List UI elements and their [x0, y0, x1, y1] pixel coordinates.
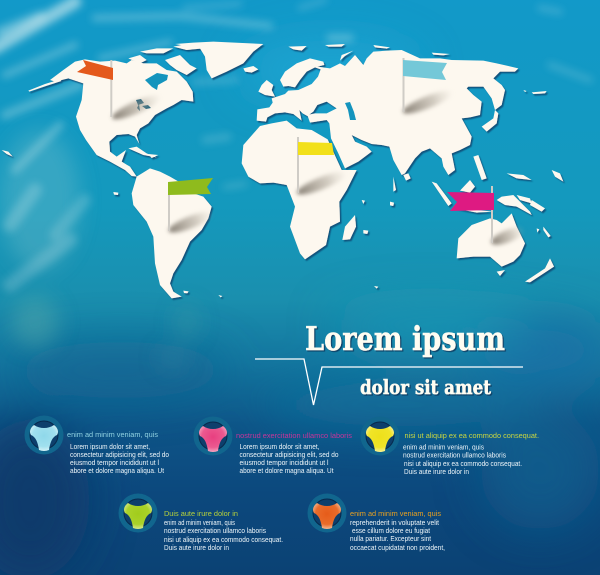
flag: Australia, magenta	[447, 186, 527, 248]
block 5 text: reprehenderit in voluptate velit	[350, 518, 439, 527]
Caspian Sea	[345, 102, 356, 120]
flag: Africa, yellow	[295, 137, 349, 199]
block 1 text: abore et dolore magna aliqua. Ut	[70, 466, 164, 475]
icon: light blue badge	[24, 416, 64, 454]
block 3 text: nisi ut aliquip ex ea commodo consequat.	[404, 459, 522, 468]
New Guinea	[497, 195, 532, 215]
block 2 text: abore et dolore magna aliqua. Ut	[240, 466, 334, 475]
South America	[132, 168, 212, 298]
block 5 text: esse cillum dolore eu fugiat	[352, 526, 430, 535]
Borneo	[460, 180, 475, 193]
block 2 text: consectetur adipisicing elit, sed do	[240, 450, 338, 459]
Great Lakes	[136, 99, 151, 111]
flag: Asia, cyan	[401, 58, 455, 118]
block 5 text: enim ad minim veniam, quis	[350, 509, 441, 518]
Hudson Bay	[145, 73, 168, 90]
icon: orange badge	[308, 494, 346, 532]
block 4 text: enim ad minim veniam, quis	[164, 518, 235, 527]
Arctic islands	[128, 55, 147, 63]
icon: yellow badge	[360, 416, 400, 456]
Eurasia	[257, 50, 518, 175]
Madagascar	[342, 215, 356, 240]
block 3 text: enim ad minim veniam, quis	[403, 442, 484, 452]
small American islets	[2, 150, 222, 297]
New Zealand	[525, 258, 554, 282]
North America	[50, 59, 193, 177]
block 3 text	[403, 431, 539, 476]
block 5 text: occaecat cupidatat non proident,	[350, 543, 445, 552]
block 2 text: nostrud exercitation ullamco laboris	[236, 431, 352, 440]
block 1 text	[67, 430, 169, 475]
block 1 text: eiusmod tempor incididunt ut l	[70, 458, 159, 467]
block 1 text: consectetur adipisicing elit, sed do	[70, 450, 169, 459]
inland waters	[136, 73, 356, 120]
flag: South America, green	[166, 178, 216, 237]
block 2 text: Lorem ipsum dolor sit amet,	[240, 442, 320, 451]
Aleutian chain	[28, 79, 61, 92]
block 4 text	[164, 509, 283, 552]
Americas and Greenland	[2, 42, 263, 298]
Cuba and Hispaniola	[128, 147, 157, 157]
Sri Lanka	[403, 173, 411, 181]
Indian Ocean and Pacific dots	[362, 170, 563, 289]
icon: pink badge	[194, 416, 232, 456]
block 4 text: nisi ut aliquip ex ea commodo consequat.	[164, 535, 283, 544]
block 2 text: eiusmod tempor incididunt ut l	[240, 458, 329, 467]
Arctic islands of Eurasia	[288, 44, 450, 61]
Africa	[242, 121, 357, 259]
block 1 text: Lorem ipsum dolor sit amet,	[70, 442, 150, 451]
block 5 text	[350, 509, 445, 552]
block 5 text: nulla pariatur. Excepteur sint	[350, 534, 431, 543]
Sumatra	[432, 182, 452, 206]
Australia	[457, 213, 525, 267]
callout line	[255, 359, 523, 405]
Philippines	[473, 155, 487, 180]
Kurils and Pacific islets	[523, 90, 551, 237]
block 4 text: nostrud exercitation ullamco laboris	[164, 526, 266, 535]
block 1 text: enim ad minim veniam, quis	[67, 430, 158, 439]
world map	[2, 42, 563, 298]
title: Lorem ipsum: Lorem ipsum	[305, 319, 505, 358]
Japan	[482, 110, 498, 132]
icon: green badge	[118, 494, 158, 532]
block 4 text: Duis aute irure dolor in	[164, 509, 238, 518]
block 3 text: nisi ut aliquip ex ea commodo consequat.	[404, 431, 539, 440]
Tasmania	[497, 270, 505, 276]
Java	[455, 208, 493, 213]
flag: Alaska, orange	[77, 60, 164, 123]
Iceland	[243, 66, 258, 73]
block 4 text: Duis aute irure dolor in	[164, 543, 229, 552]
subtitle: dolor sit amet: dolor sit amet	[360, 375, 492, 399]
block 3 text: nostrud exercitation ullamco laboris	[403, 450, 506, 460]
Old World	[242, 44, 563, 289]
United Kingdom and Ireland	[258, 80, 275, 97]
block 2 text	[236, 431, 352, 475]
Greenland	[175, 42, 263, 78]
block 3 text: Duis aute irure dolor in	[404, 467, 469, 476]
